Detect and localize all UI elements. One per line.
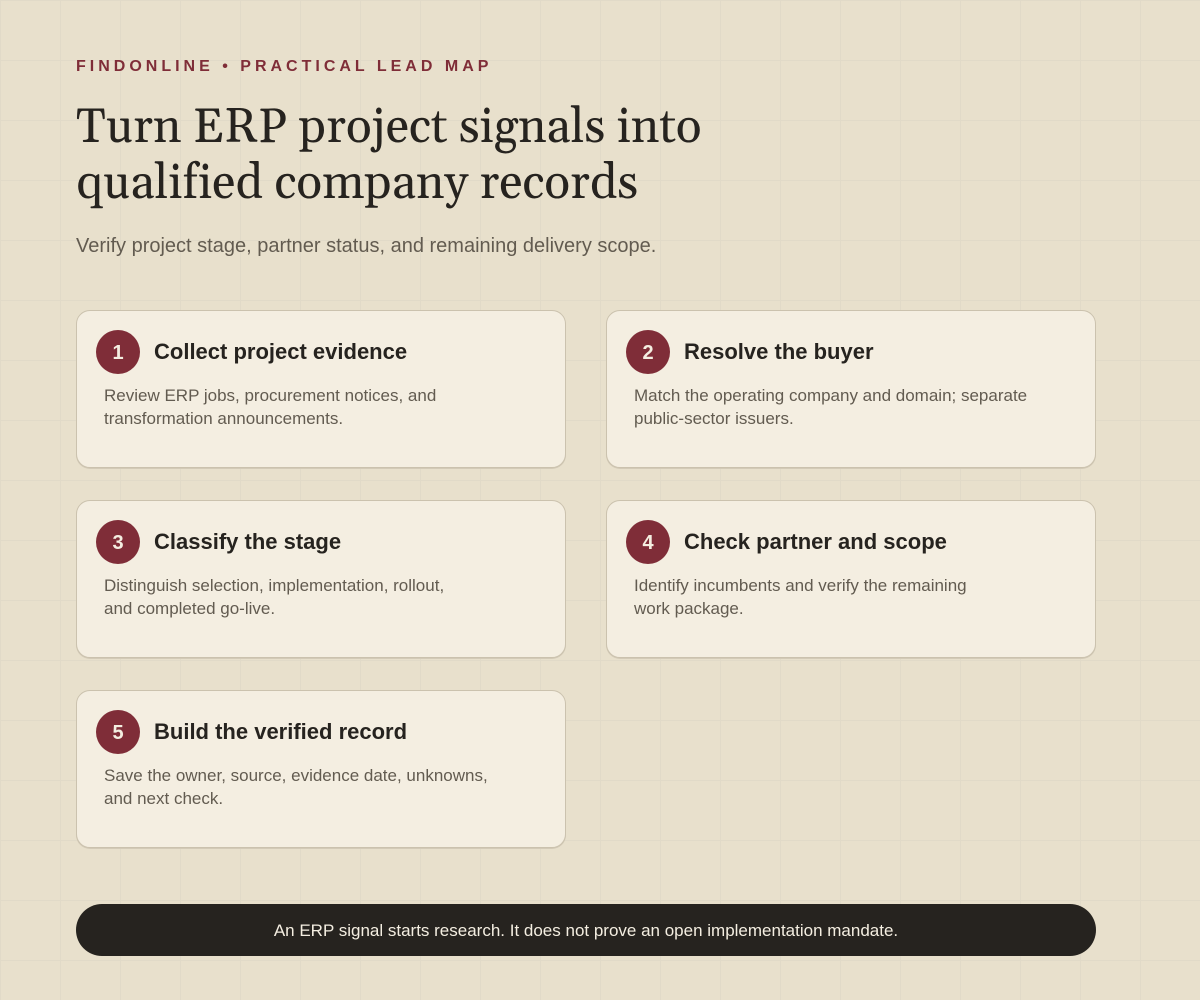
step 2 text: Match the operating company and domain; separate — [634, 386, 1027, 405]
icon: number 4 badge: 4 — [642, 532, 654, 554]
step 3 heading: Classify the stage — [154, 529, 341, 554]
icon: number 2 badge — [626, 330, 670, 374]
title — [76, 98, 702, 215]
icon: number 3 badge — [96, 520, 140, 564]
step 3 text: Distinguish selection, implementation, rollout, — [104, 576, 444, 595]
icon: number 2 badge: 2 — [642, 342, 654, 364]
step 5 text: Save the owner, source, evidence date, unknowns, — [104, 766, 488, 785]
step 4 text: work package. — [634, 599, 744, 618]
step 5 heading: Build the verified record — [154, 719, 407, 744]
panel: step 3 — [76, 500, 566, 658]
icon: number 1 badge: 1 — [112, 342, 124, 364]
title: Turn ERP project signals into — [76, 98, 702, 159]
icon: number 5 badge: 5 — [112, 722, 124, 744]
icon: number 5 badge — [96, 710, 140, 754]
eyebrow: FINDONLINE • PRACTICAL LEAD MAP — [76, 58, 492, 75]
subtitle: Verify project stage, partner status, and remaining delivery scope. — [76, 235, 656, 257]
panel: step 2 — [606, 310, 1096, 468]
step 4 text: Identify incumbents and verify the remaining — [634, 576, 967, 595]
step 2 heading: Resolve the buyer — [684, 339, 874, 364]
step 1 heading: Collect project evidence — [154, 339, 407, 364]
panel: step 1 — [76, 310, 566, 468]
step 3 text: and completed go-live. — [104, 599, 275, 618]
panel: step 5 — [76, 690, 566, 848]
icon: number 1 badge — [96, 330, 140, 374]
step 4 heading: Check partner and scope — [684, 529, 947, 554]
step 5 text — [104, 766, 488, 808]
title: qualified company records — [76, 154, 638, 215]
step 1 text: Review ERP jobs, procurement notices, and — [104, 386, 436, 405]
step 4 text — [634, 576, 967, 618]
step 3 text — [104, 576, 444, 618]
step 2 text — [634, 386, 1027, 428]
step 1 text — [104, 386, 436, 428]
step 2 text: public-sector issuers. — [634, 409, 794, 428]
callout banner — [76, 904, 1096, 956]
icon: number 3 badge: 3 — [112, 532, 124, 554]
icon: number 4 badge — [626, 520, 670, 564]
callout banner: An ERP signal starts research. It does not prove an open implementation mandate. — [274, 921, 898, 940]
step 5 text: and next check. — [104, 789, 223, 808]
step 1 text: transformation announcements. — [104, 409, 343, 428]
panel: step 4 — [606, 500, 1096, 658]
